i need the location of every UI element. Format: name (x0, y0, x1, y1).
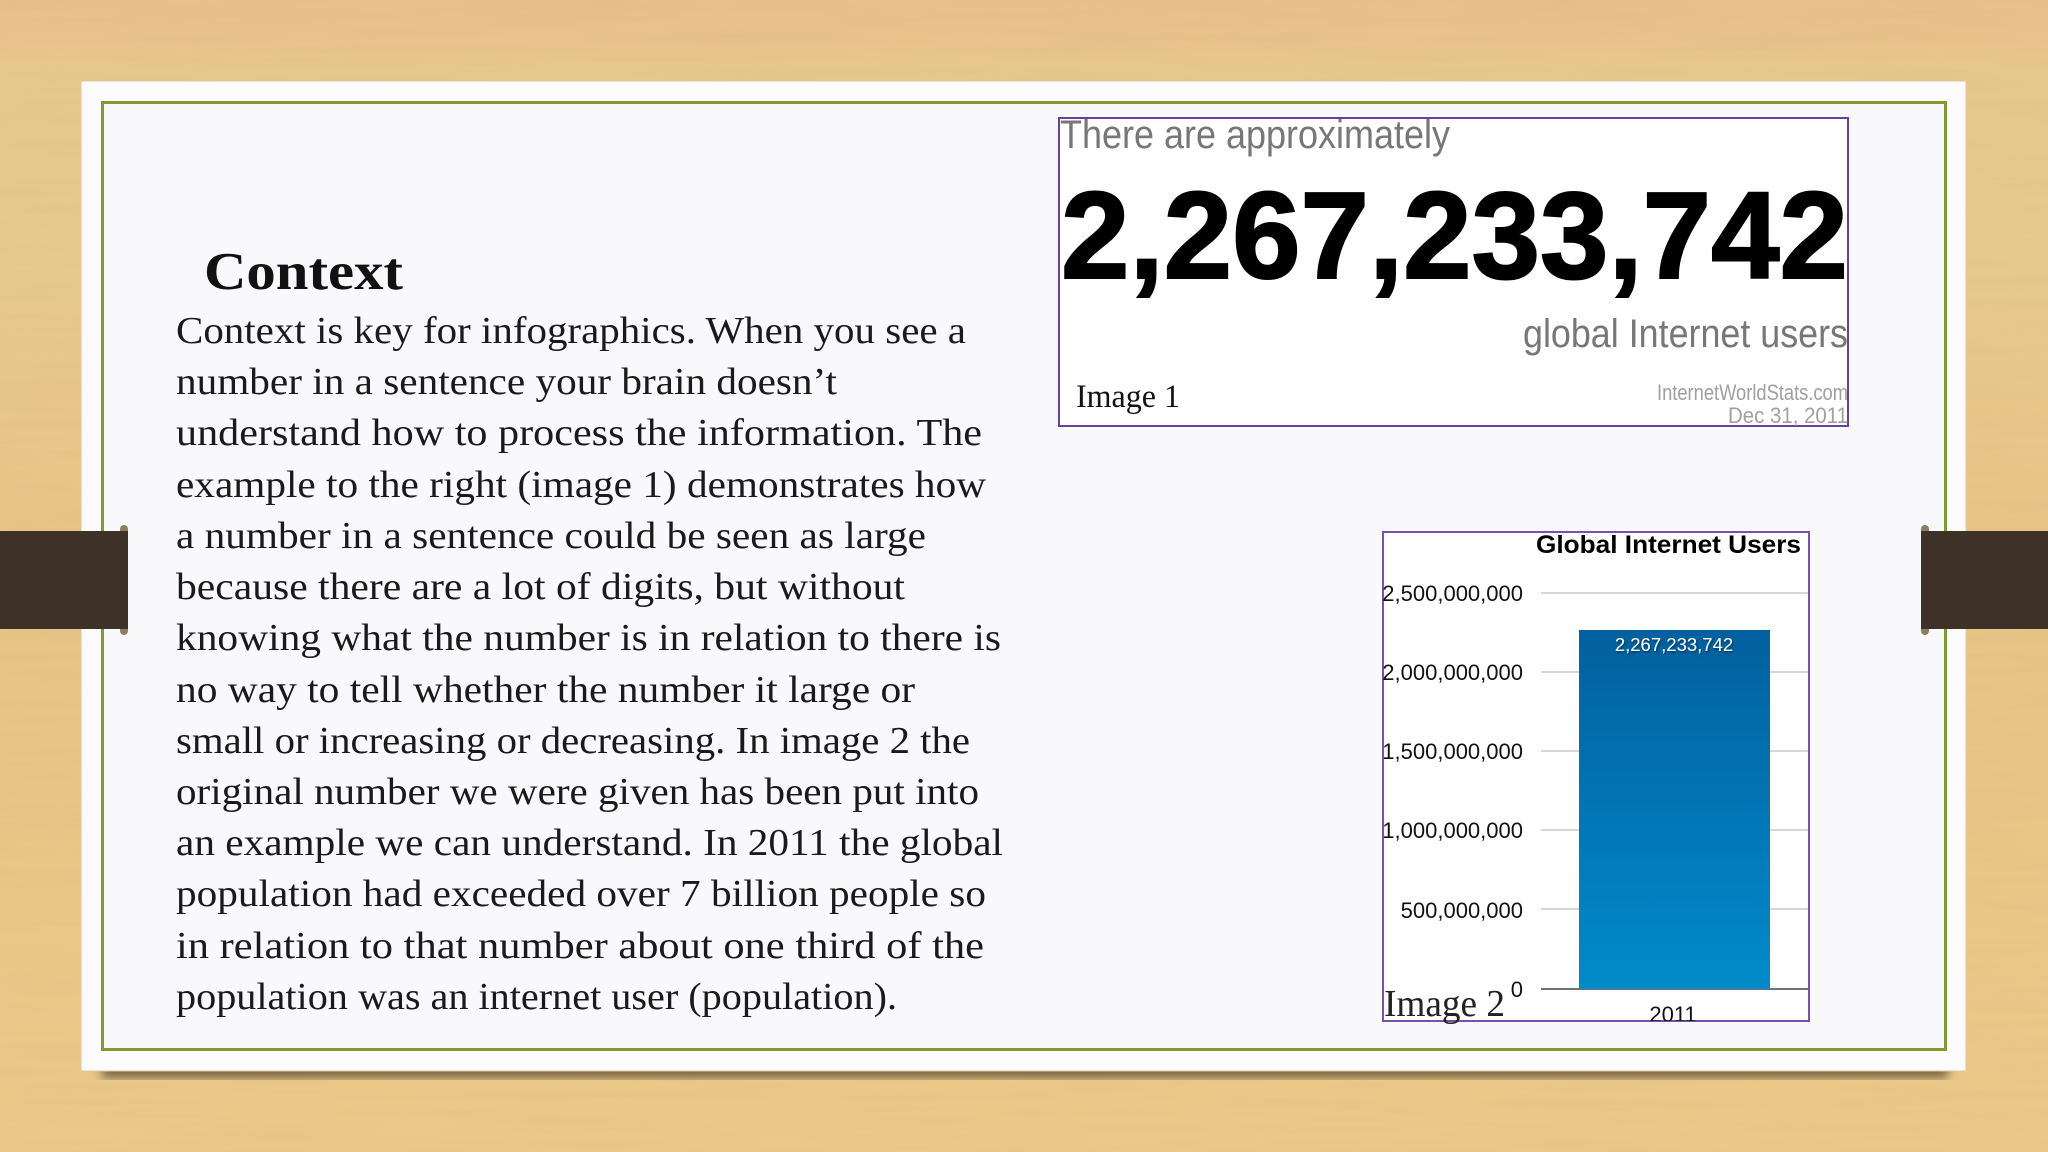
users label: global Internet users (1523, 312, 1848, 356)
x axis label: 2011 (1649, 1002, 1697, 1027)
big number: 2,267,233,742 (1061, 168, 1848, 305)
body paragraph: an example we can understand. In 2011 the global (176, 822, 1003, 864)
heading: Context: Context (204, 243, 403, 301)
body paragraph: population had exceeded over 7 billion people so (176, 873, 986, 915)
source: InternetWorldStats.com (1657, 380, 1848, 405)
right tab (1921, 525, 2048, 635)
green frame (102, 102, 1946, 1050)
y axis labels (1382, 581, 1523, 1002)
y axis labels: 500,000,000 (1401, 898, 1523, 923)
body paragraph: small or increasing or decreasing. In image 2 the (176, 720, 970, 762)
body paragraph: because there are a lot of digits, but without (176, 566, 905, 608)
baseline axis (1541, 988, 1808, 990)
body paragraph: a number in a sentence could be seen as large (176, 515, 926, 557)
image 2: bar chart (1382, 531, 1809, 1027)
date: Dec 31, 2011 (1728, 403, 1848, 428)
left tab (0, 525, 128, 635)
chart title: Global Internet Users (1536, 531, 1801, 559)
body paragraph: in relation to that number about one third of the (176, 925, 984, 967)
bar (1579, 630, 1770, 989)
body paragraph: Context is key for infographics. When you see a (176, 310, 966, 352)
image 1: statistic panel (1059, 113, 1848, 428)
y axis labels: 1,000,000,000 (1382, 818, 1523, 843)
caption: Image 2: Image 2 (1384, 983, 1505, 1025)
caption: Image 1: Image 1 (1076, 379, 1180, 415)
y axis labels: 2,500,000,000 (1382, 581, 1523, 606)
body paragraph: understand how to process the information. The (176, 412, 982, 454)
intro text: There are approximately (1060, 113, 1450, 157)
y axis labels: 1,500,000,000 (1382, 739, 1523, 764)
y axis labels: 0 (1511, 977, 1523, 1002)
paper card (81, 81, 1966, 1071)
body paragraph (176, 310, 1003, 1018)
body paragraph: population was an internet user (population). (176, 976, 897, 1018)
body paragraph: no way to tell whether the number it large or (176, 669, 915, 711)
paper shadow (102, 1058, 1948, 1078)
gridlines (1541, 593, 1808, 909)
body paragraph: example to the right (image 1) demonstrates how (176, 464, 987, 506)
body paragraph: number in a sentence your brain doesn’t (176, 361, 837, 403)
body paragraph: knowing what the number is in relation to there is (176, 617, 1001, 659)
body paragraph: original number we were given has been put into (176, 771, 979, 813)
y axis labels: 2,000,000,000 (1382, 660, 1523, 685)
bar value: 2,267,233,742 (1615, 634, 1733, 655)
